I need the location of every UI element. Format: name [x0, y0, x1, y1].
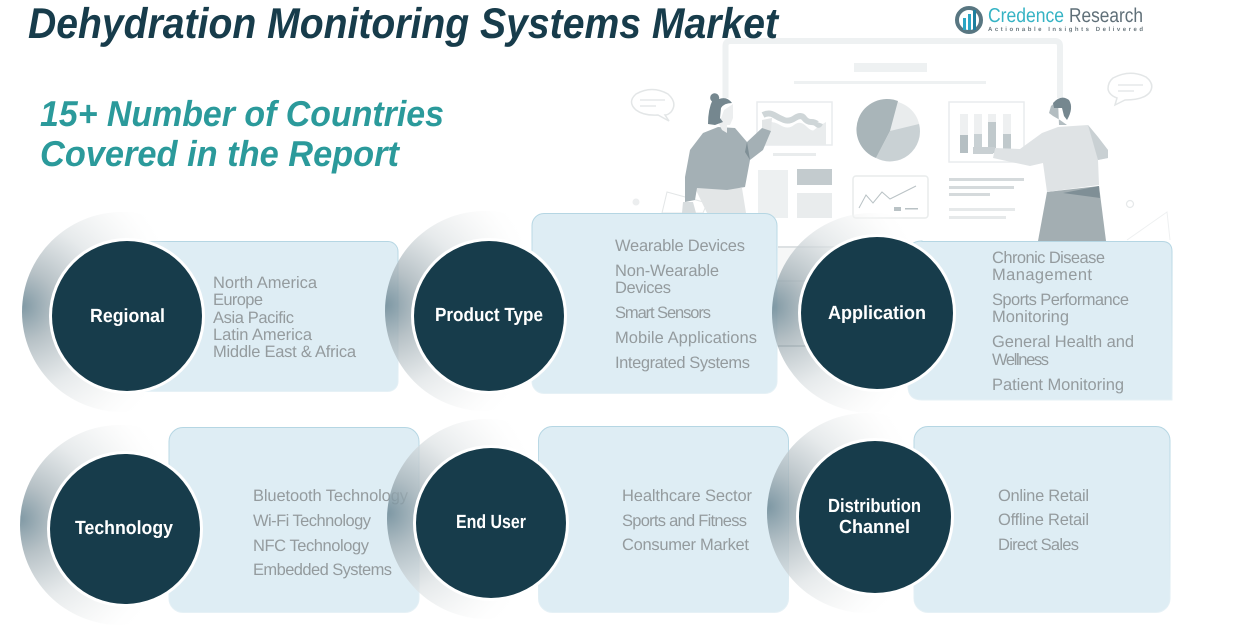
badge: end user: End User	[456, 512, 527, 533]
panel: regional: Latin America	[213, 326, 313, 344]
decorative dots and plant	[632, 198, 1170, 240]
panel: technology: Wi-Fi Technology	[253, 512, 372, 530]
panel: application: General Health and	[992, 333, 1134, 351]
badge: product type	[385, 211, 585, 411]
badge: distribution channel	[767, 413, 967, 613]
panel: distribution channel: Offline Retail	[998, 511, 1089, 529]
panel: product type: Non-Wearable	[615, 262, 719, 280]
badge: technology	[20, 425, 220, 625]
logo: Credence Research: Actionable Insights Delivered	[988, 26, 1143, 33]
panel: technology	[169, 428, 419, 612]
panel: regional	[130, 242, 398, 392]
text lines	[949, 178, 1024, 219]
badge: application: Application	[828, 303, 926, 324]
speech bubble left	[632, 90, 674, 121]
panel: product type: Wearable Devices	[615, 237, 745, 255]
area chart card	[757, 102, 832, 156]
panel: application: Wellness	[992, 351, 1049, 369]
panel: application: Sports Performance	[992, 291, 1129, 309]
logo: Credence Research: Research	[1069, 5, 1143, 27]
badge: end user	[387, 419, 587, 619]
speech bubble right	[1108, 73, 1152, 105]
panel: product type	[532, 214, 777, 394]
panel: distribution channel: Online Retail	[998, 487, 1089, 505]
badge: product type: Product Type	[435, 305, 543, 326]
subtitle: Covered in the Report	[40, 133, 401, 174]
panel: technology: NFC Technology	[253, 537, 370, 555]
panel: product type: Integrated Systems	[615, 354, 750, 372]
panel: product type: Smart Sensors	[615, 304, 711, 322]
panel: technology: Embedded Systems	[253, 561, 392, 579]
badge: application	[772, 213, 972, 413]
badge: distribution channel: Channel	[839, 517, 910, 538]
line chart card	[853, 176, 928, 218]
panel: regional: North America	[213, 274, 318, 292]
table lines behind application badge	[778, 246, 838, 347]
panel: regional: Middle East & Africa	[213, 343, 357, 361]
panel: application: Management	[992, 266, 1092, 284]
panel: end user: Consumer Market	[622, 536, 749, 554]
panel: distribution channel	[914, 426, 1170, 612]
badge: regional: Regional	[90, 306, 165, 327]
panel: distribution channel: Direct Sales	[998, 536, 1079, 554]
subtitle: 15+ Number of Countries	[40, 93, 444, 134]
panel: product type: Mobile Applications	[615, 329, 757, 347]
monitor frame	[726, 41, 1060, 98]
subtitle	[40, 93, 444, 174]
badge: distribution channel: Distribution	[828, 496, 921, 517]
panel: product type: Devices	[615, 279, 671, 297]
bar chart card	[949, 102, 1024, 162]
logo: Credence Research: Credence	[988, 5, 1064, 27]
panel: end user: Healthcare Sector	[622, 487, 752, 505]
badge: technology: Technology	[75, 518, 173, 539]
panel: end user: Sports and Fitness	[622, 512, 747, 530]
logo: Credence Research	[957, 5, 1143, 33]
title: Dehydration Monitoring Systems Market	[28, 0, 780, 48]
panel: regional: Europe	[213, 291, 263, 309]
pie chart	[856, 99, 920, 161]
man	[973, 98, 1108, 241]
panel: application: Monitoring	[992, 308, 1069, 326]
panel: application	[908, 241, 1172, 400]
small rectangles	[758, 169, 832, 218]
panel: application: Chronic Disease	[992, 249, 1105, 267]
panel: end user	[538, 426, 788, 612]
illustration: presentation scene	[632, 41, 1170, 347]
woman	[662, 93, 772, 213]
panel: technology: Bluetooth Technology	[253, 487, 409, 505]
panel: regional: Asia Pacific	[213, 309, 294, 327]
badge: regional	[22, 212, 222, 412]
panel: application: Patient Monitoring	[992, 376, 1124, 394]
